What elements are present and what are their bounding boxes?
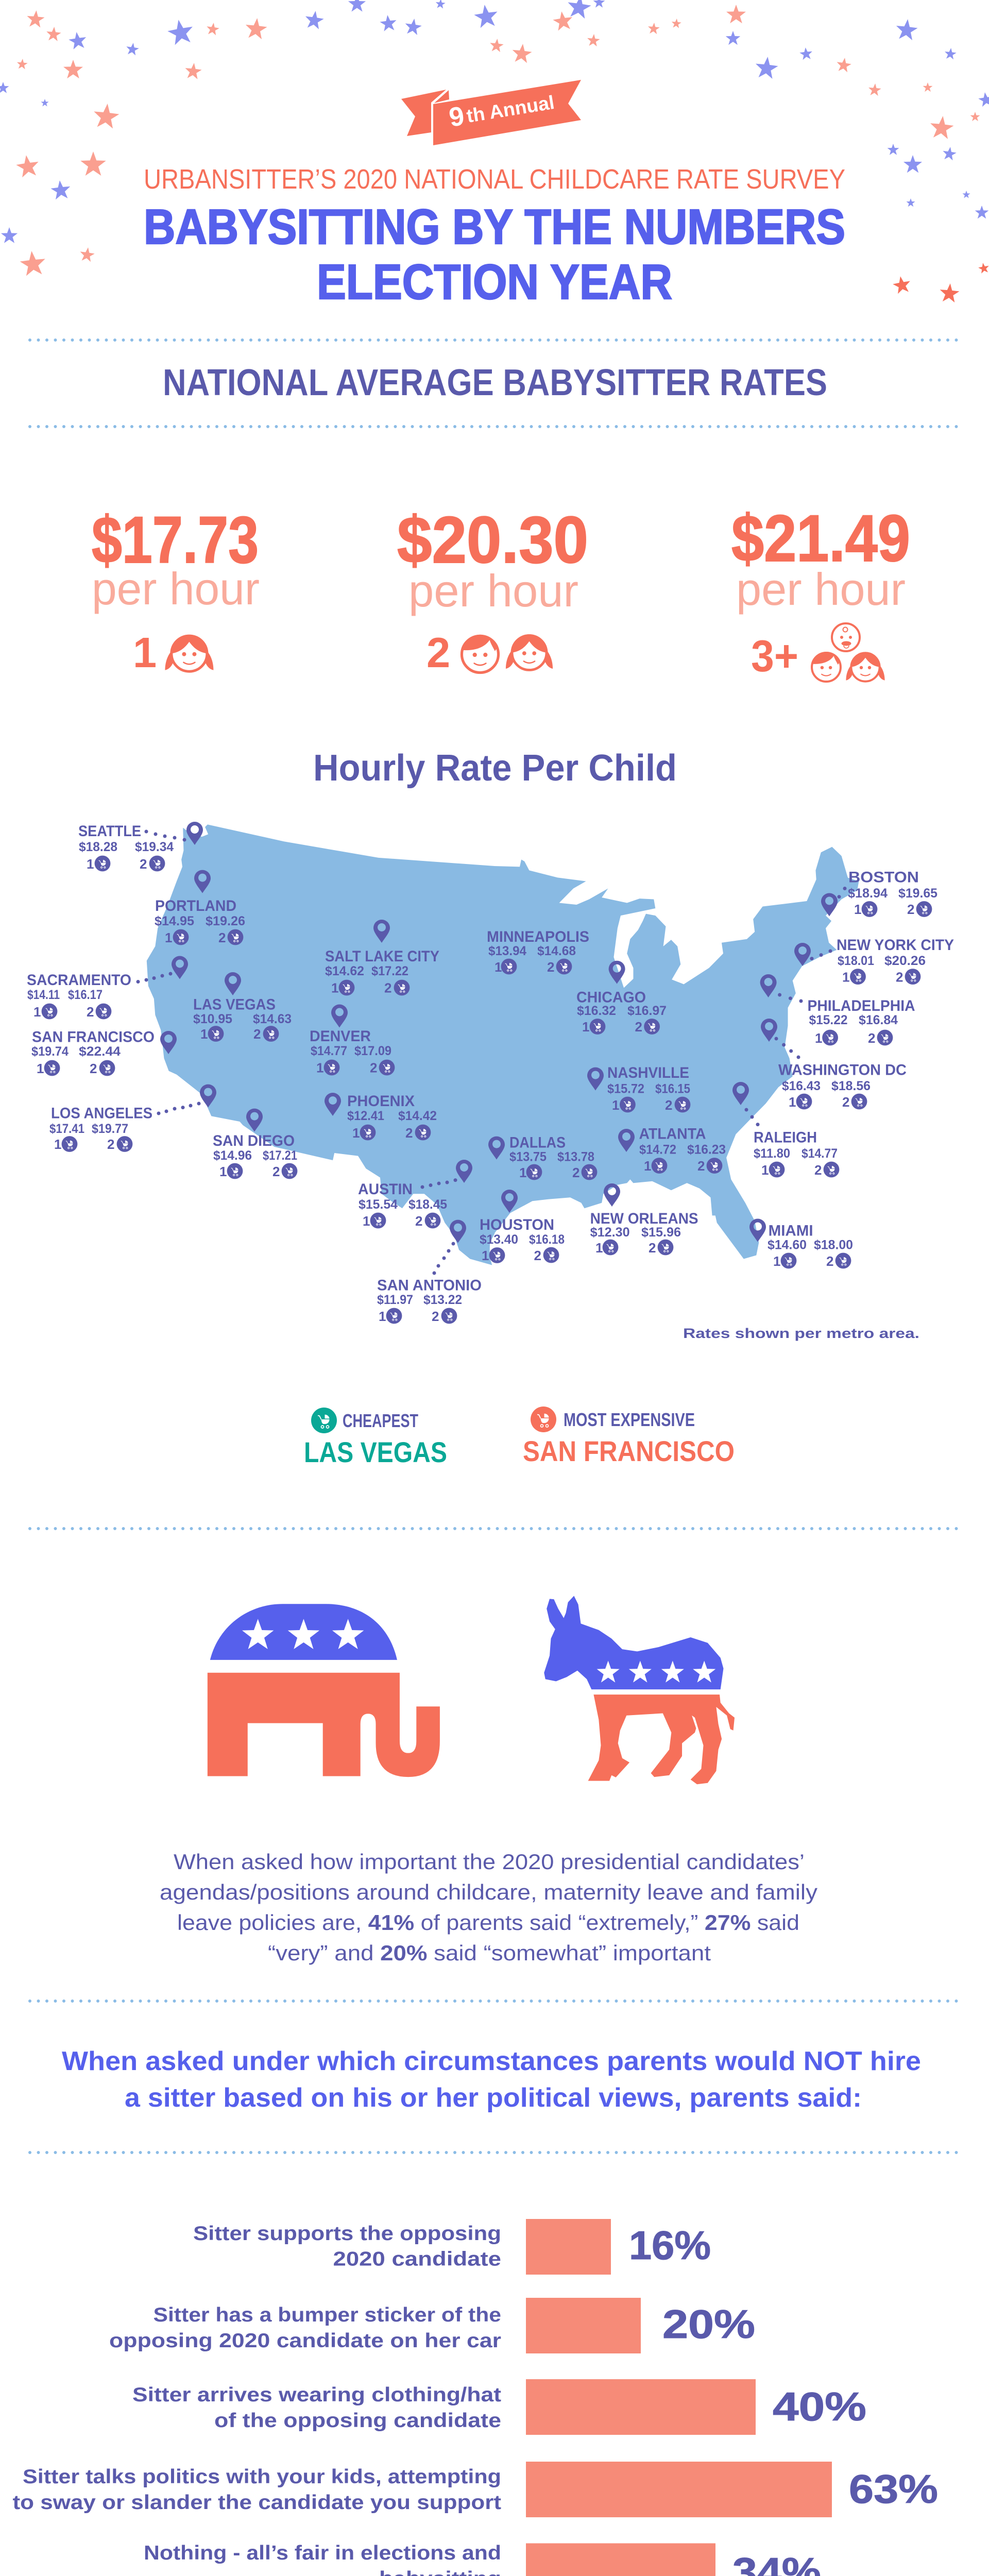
bar chart [12,2219,938,2576]
city: Salt Lake City: 1 [331,980,338,995]
text block: candidate importance: “very” and 20% said “somewhat” important [268,1941,711,1965]
city: Raleigh: $11.80 [754,1146,790,1161]
city: Phoenix: 1 [352,1125,360,1141]
city: Boston: 2 [907,902,914,917]
city: Seattle: $19.34 [135,840,174,854]
city: Houston: $13.40 [480,1232,518,1247]
city: Washington DC [761,1019,907,1110]
city: Seattle: 2 [140,856,147,872]
city: Denver: $14.77 [311,1044,347,1058]
city: Miami: $18.00 [814,1238,853,1252]
rate: 1 child [92,503,260,676]
city: San Francisco: $22.44 [79,1044,121,1059]
city: San Diego: SAN DIEGO [213,1132,295,1149]
bar: opposing candidate [193,2219,711,2275]
city: Portland: PORTLAND [155,897,236,914]
city: Dallas: 1 [519,1165,526,1180]
city: Boston [821,869,937,917]
city: Portland: 2 [218,930,226,945]
city: San Diego: 2 [272,1164,280,1179]
callout: cheapest: LAS VEGAS [304,1436,447,1468]
city: Sacramento: SACRAMENTO [27,972,131,989]
city: San Antonio: 2 [432,1309,439,1324]
city: Dallas: 2 [572,1165,579,1180]
city: Sacramento: 1 [33,1004,41,1020]
city: Miami: $14.60 [768,1238,807,1252]
city: Denver: 1 [316,1060,323,1076]
icon: Democratic donkey [544,1596,735,1784]
city: Raleigh: $14.77 [802,1146,838,1161]
city: Atlanta: 2 [697,1158,705,1174]
city: Washington DC: 2 [842,1094,849,1110]
heading: circumstances not to hire [62,2046,921,2113]
city: Miami: 1 [773,1253,780,1269]
city: Miami [749,1219,853,1269]
city: Austin: AUSTIN [358,1181,413,1198]
city: Philadelphia: $15.22 [809,1013,848,1027]
city: Minneapolis [487,928,589,975]
bar: clothing or hat [132,2379,866,2435]
rate: 2 children: $20.30 [397,503,588,577]
city: Dallas: DALLAS [509,1134,566,1151]
city: Los Angeles: $17.41 [49,1122,84,1136]
heading: circumstances not to hire: a sitter based on his or her political views, parents said: [125,2083,862,2113]
city: Seattle: $18.28 [79,840,117,854]
city: New York City: 2 [896,970,903,985]
city: Las Vegas: 1 [200,1026,208,1042]
bar: talks politics: 63% [849,2466,938,2512]
text block: candidate importance [160,1850,817,1965]
city: San Francisco: 1 [37,1061,44,1076]
bar: opposing candidate: 2020 candidate [333,2248,501,2270]
city: Miami: MIAMI [769,1223,813,1240]
city: Minneapolis: $14.68 [537,944,576,958]
icon: Republican elephant [208,1604,440,1777]
rate: 2 children [397,503,588,676]
city: Nashville: $15.72 [607,1082,644,1096]
city: San Antonio: 1 [379,1309,386,1324]
city: Atlanta: $14.72 [639,1142,676,1157]
city: San Antonio [377,1220,482,1324]
city: Dallas [488,1134,597,1180]
city: Las Vegas: LAS VEGAS [193,996,276,1013]
city: Chicago: $16.32 [577,1004,616,1018]
bar: bumper sticker [109,2298,755,2353]
callout: cheapest [304,1408,447,1468]
city: Washington DC: 1 [789,1094,796,1110]
city: Austin: $18.45 [408,1197,447,1212]
city: New York City: NEW YORK CITY [837,937,954,954]
rate: 1 child: $17.73 [92,503,259,577]
city: Boston: 1 [854,902,861,917]
city: New Orleans: 1 [595,1240,603,1256]
rate: 1 child: per hour [92,563,260,614]
city: Philadelphia: $16.84 [859,1013,898,1027]
city: Houston: 1 [482,1248,489,1263]
map shape [147,824,859,1265]
city: San Francisco: $19.74 [31,1044,69,1059]
city: San Antonio: SAN ANTONIO [377,1277,482,1294]
city: Denver: 2 [370,1060,377,1076]
city: Austin: 2 [415,1213,422,1229]
city: San Francisco: SAN FRANCISCO [32,1029,155,1046]
city: Phoenix: 2 [405,1125,413,1141]
city: New Orleans [590,1183,698,1256]
callout: most expensive [523,1406,735,1467]
city: Philadelphia: 2 [868,1030,875,1046]
city: Las Vegas: $14.63 [253,1012,292,1026]
city: San Diego: $17.21 [263,1148,297,1163]
rate: 3+ children: $21.49 [731,502,910,575]
city: Chicago: 2 [635,1019,642,1035]
bar: talks politics [12,2462,938,2517]
city: Philadelphia: PHILADELPHIA [808,997,915,1014]
city: Denver: DENVER [310,1028,371,1045]
map of US with city rates [27,822,954,1324]
city: Raleigh: 2 [814,1162,822,1178]
city: Sacramento: $14.11 [27,988,60,1002]
title line 1: BABYSITTING BY THE NUMBERS [144,199,845,255]
city: Washington DC: $16.43 [782,1079,821,1093]
city: Seattle: 1 [87,856,94,872]
city: Los Angeles: 2 [107,1137,114,1152]
city: Seattle [78,822,203,872]
city: New Orleans: NEW ORLEANS [590,1210,698,1227]
bar: talks politics: Sitter talks politics with your kids, attempting [23,2466,501,2488]
rate: 3+ children: 3+ [751,632,798,681]
city: Los Angeles [49,1084,216,1152]
callout: most expensive: MOST EXPENSIVE [564,1409,695,1430]
ribbon banner: 9th Annual [401,80,581,145]
city: New York City: $18.01 [838,954,874,968]
city: New Orleans: 2 [649,1240,656,1256]
city: Phoenix: $14.42 [398,1109,437,1123]
subtitle: URBANSITTER’S 2020 NATIONAL CHILDCARE RATE SURVEY [144,164,845,195]
city: Dallas: $13.75 [509,1149,547,1164]
heading: hourly rate per child: Hourly Rate Per Child [313,748,677,789]
city: Raleigh: RALEIGH [754,1129,817,1146]
city: Washington DC: WASHINGTON DC [778,1061,907,1079]
bar: clothing or hat: 40% [773,2384,866,2429]
city: Houston: HOUSTON [480,1216,554,1233]
city: Austin: $15.54 [359,1197,398,1212]
city: Salt Lake City: 2 [384,980,391,995]
city: Houston: 2 [534,1248,541,1263]
city: San Antonio: $11.97 [377,1293,413,1307]
background stars [0,0,989,303]
city: Salt Lake City: $17.22 [371,964,408,978]
city: Atlanta: ATLANTA [639,1126,706,1143]
city: New York City [794,937,954,985]
city: Salt Lake City [325,920,439,995]
city: Houston: $16.18 [529,1232,565,1247]
title line 2: ELECTION YEAR [317,255,672,310]
bar: bumper sticker: opposing 2020 candidate on her car [109,2330,501,2352]
city: Raleigh: 1 [761,1162,769,1178]
city: Los Angeles: 1 [54,1137,61,1152]
city: Nashville: 2 [665,1097,672,1113]
city: Atlanta: 1 [644,1158,651,1174]
rate: 2 children: 2 [427,629,450,676]
city: Portland: $14.95 [155,914,194,928]
city: San Diego [213,1109,297,1179]
city: Las Vegas: 2 [253,1026,261,1042]
bar: opposing candidate: 16% [629,2223,711,2268]
bar: clothing or hat: Sitter arrives wearing clothing/hat [132,2384,501,2406]
city: Austin [358,1160,472,1229]
city: Sacramento [27,956,188,1020]
city: Denver: $17.09 [354,1044,391,1058]
city: Nashville: $16.15 [655,1082,690,1096]
bar: bumper sticker: 20% [662,2301,755,2347]
city: New Orleans: $15.96 [641,1225,681,1240]
city: Portland [155,870,245,945]
city: New Orleans: $12.30 [590,1225,630,1240]
city: Chicago: 1 [582,1019,589,1035]
city: Minneapolis: $13.94 [488,944,526,958]
ribbon banner: 9th Annual: th Annual [465,92,556,127]
bar: nothing: Nothing - all’s fair in elections and [144,2542,501,2564]
city: Portland: 1 [165,930,172,945]
city: Chicago [576,961,667,1035]
city: San Diego: $14.96 [213,1148,252,1163]
city: Phoenix: $12.41 [347,1109,384,1123]
city: Las Vegas: $10.95 [193,1012,232,1026]
city: Atlanta [618,1126,726,1174]
city: Raleigh [732,1082,839,1178]
rate: 3+ children: per hour [736,564,906,615]
city: Los Angeles: LOS ANGELES [51,1105,152,1122]
city: Miami: 2 [826,1253,833,1269]
city: Minneapolis: 1 [494,959,502,975]
bar: nothing [144,2542,821,2576]
text block: candidate importance: When asked how important the 2020 presidential candidates’ [174,1850,805,1874]
city: Dallas: $13.78 [557,1149,594,1164]
city: San Francisco: 2 [90,1061,97,1076]
rate: 2 children: per hour [408,565,578,616]
city: Austin: 1 [363,1213,370,1229]
callout: most expensive: SAN FRANCISCO [523,1435,735,1467]
city: Boston: $18.94 [848,886,888,901]
text block: candidate importance: leave policies are, 41% of parents said “extremely,” 27% said [177,1910,799,1935]
city: Nashville [587,1064,690,1113]
city: Sacramento: $16.17 [68,988,103,1002]
city: New York City: $20.26 [884,954,926,968]
city: Los Angeles: $19.77 [92,1122,128,1136]
city: Minneapolis: MINNEAPOLIS [487,928,589,945]
city: Salt Lake City: SALT LAKE CITY [325,948,439,965]
city: Phoenix: PHOENIX [347,1093,415,1110]
city: Washington DC: $18.56 [831,1079,871,1093]
heading: circumstances not to hire: When asked under which circumstances parents would NOT hire [62,2046,921,2076]
city: Sacramento: 2 [87,1004,94,1020]
heading: national average rates: NATIONAL AVERAGE BABYSITTER RATES [163,362,827,403]
city: Boston: BOSTON [848,869,919,886]
city: Philadelphia [760,974,915,1046]
callout: cheapest: CHEAPEST [343,1410,418,1431]
bar: bumper sticker: Sitter has a bumper sticker of the [154,2304,501,2326]
city: Nashville: NASHVILLE [607,1064,689,1081]
city: Atlanta: $16.23 [687,1142,726,1157]
rate: 1 child: 1 [133,629,157,676]
city: Phoenix [325,1093,437,1141]
city: Salt Lake City: $14.62 [325,964,364,978]
rate: 3+ children [731,502,910,682]
city: Chicago: CHICAGO [576,989,646,1006]
bar: opposing candidate: Sitter supports the opposing [193,2223,501,2245]
city: Chicago: $16.97 [627,1004,667,1018]
city: Boston: $19.65 [898,886,937,901]
ribbon banner: 9th Annual: 9 [447,101,466,133]
bar: talks politics: to sway or slander the candidate you support [12,2492,501,2514]
city: Minneapolis: 2 [547,959,554,975]
bar: clothing or hat: of the opposing candidate [214,2410,501,2432]
note: rates per metro area: Rates shown per metro area. [683,1326,919,1341]
city: Philadelphia: 1 [815,1030,822,1046]
city: Nashville: 1 [612,1097,619,1113]
city: New York City: 1 [842,970,849,985]
city: Seattle: SEATTLE [78,823,141,840]
city: San Francisco [31,1029,177,1076]
city: Las Vegas [193,972,292,1042]
city: Portland: $19.26 [206,914,245,928]
city: San Diego: 1 [219,1164,227,1179]
city: Denver [310,1005,395,1076]
city: San Antonio: $13.22 [423,1293,462,1307]
text block: candidate importance: agendas/positions around childcare, maternity leave and family [160,1880,817,1904]
city: Houston [480,1190,565,1263]
